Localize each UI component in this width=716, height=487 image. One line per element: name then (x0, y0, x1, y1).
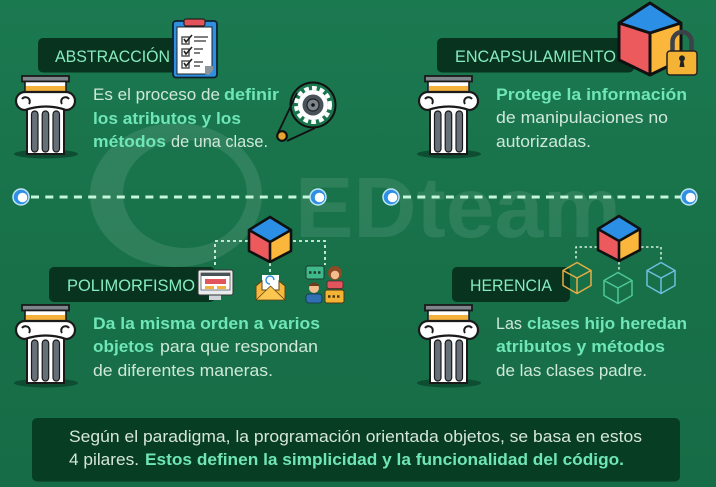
description text (496, 85, 687, 151)
description text: de las clases padre. (496, 361, 647, 380)
footer callout: 4 pilares. (69, 450, 139, 469)
pillar (417, 305, 481, 388)
description text: definir (224, 85, 279, 104)
watermark: EDteam logo (90, 123, 621, 267)
icon: green child cube (604, 272, 632, 304)
label: herencia: HERENCIA (470, 276, 553, 295)
description text: clases hijo heredan (527, 314, 687, 333)
footer callout (32, 418, 680, 482)
description text: de diferentes maneras. (93, 361, 273, 380)
description text: Es el proceso de (93, 85, 220, 104)
description text: los atributos y los (93, 109, 241, 128)
divider: left dashed line (13, 189, 326, 205)
label: abstracción (38, 38, 178, 72)
description text: objetos (93, 337, 154, 356)
description text: autorizadas. (496, 132, 591, 151)
watermark: EDteam logo: EDteam (295, 161, 621, 256)
pillar (417, 76, 481, 158)
description text: de una clase. (171, 132, 268, 151)
description text: para que respondan (160, 337, 318, 356)
description text: métodos (93, 132, 166, 151)
icon: cube with padlock (619, 3, 697, 75)
section: encapsulamiento (417, 3, 697, 158)
description text (93, 314, 320, 380)
icon: cube (249, 217, 291, 262)
icon: cube (598, 216, 640, 261)
icon: gear and belt (277, 82, 336, 141)
icon: clipboard (173, 19, 217, 78)
label: polimorfismo: POLIMORFISMO (67, 276, 195, 295)
footer callout: Según el paradigma, la programación orientada objetos, se basa en estos (69, 427, 642, 446)
icon: monitor (198, 270, 233, 300)
icon: people chatting (306, 266, 344, 303)
description text (93, 85, 279, 151)
description text (496, 314, 687, 380)
description text: de manipulaciones no (496, 108, 668, 127)
pillar (14, 76, 78, 158)
divider: right dashed line (383, 189, 697, 205)
icon: envelope (256, 275, 285, 300)
description text: Las (496, 314, 522, 333)
description text: atributos y métodos (496, 337, 665, 356)
section: polimorfismo (14, 217, 344, 388)
pillar (14, 305, 78, 388)
description text: Da la misma orden a varios (93, 314, 320, 333)
label: polimorfismo (49, 267, 215, 302)
connector lines (576, 247, 661, 272)
footer callout: Estos definen la simplicidad y la funcionalidad del código. (145, 450, 624, 469)
section: herencia (417, 216, 687, 388)
label: encapsulamiento (437, 38, 634, 72)
icon: orange child cube (563, 262, 591, 294)
section: abstracción (14, 19, 336, 158)
description text: Protege la información (496, 85, 687, 104)
icon: blue child cube (647, 262, 675, 294)
label: encapsulamiento: ENCAPSULAMIENTO (455, 47, 616, 66)
label: herencia (452, 267, 570, 302)
label: abstracción: ABSTRACCIÓN (55, 47, 170, 66)
connector lines (215, 241, 325, 275)
